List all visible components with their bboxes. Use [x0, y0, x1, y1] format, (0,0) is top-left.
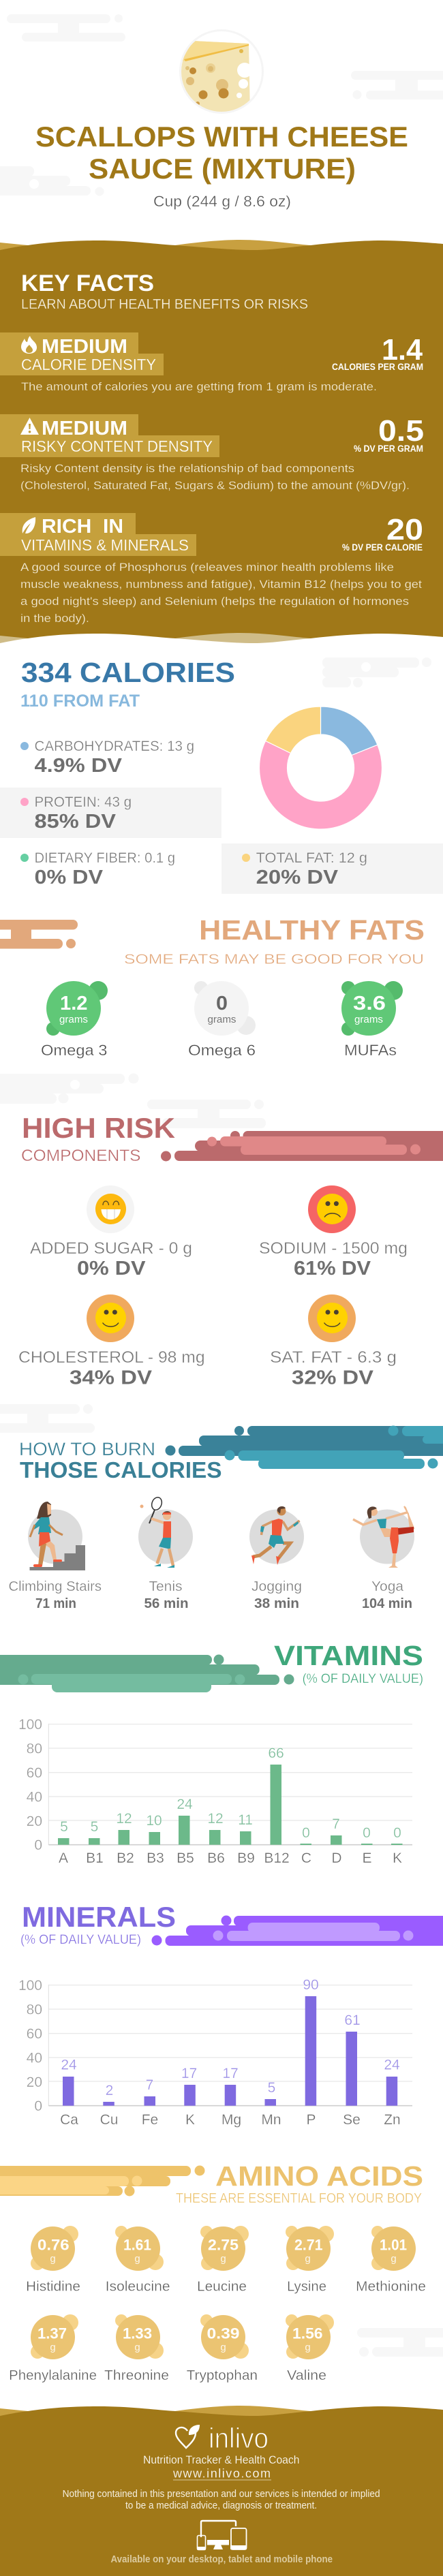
bar chart: vitamins: 66 — [268, 1745, 284, 1761]
legend: protein — [0, 788, 222, 838]
bar chart: vitamins: 5 — [91, 1819, 98, 1835]
heading: key facts: LEARN ABOUT HEALTH BENEFITS OR RISKS — [21, 297, 308, 312]
bar chart: vitamins: B6 — [207, 1850, 225, 1866]
amino acid: leucine — [197, 2226, 249, 2295]
icon: jogger — [251, 1506, 300, 1565]
risk item: sodium: 61% DV — [294, 1258, 371, 1279]
amino acid: leucine: Leucine — [197, 2280, 247, 2295]
bar chart: minerals: 90 — [303, 1977, 319, 1993]
bar chart: vitamins: 100 — [18, 1717, 42, 1733]
panel: calorie density: The amount of calories you are getting from 1 gram is moderate. — [21, 380, 377, 393]
amino acid: valine: 1.56 — [292, 2325, 323, 2342]
disclaimer: to be a medical advice, diagnosis or treatment. — [125, 2500, 317, 2511]
amino acid: threonine: Threonine — [104, 2368, 169, 2383]
bar chart: vitamins: 0 — [363, 1825, 371, 1841]
risk item: saturated fat: 32% DV — [292, 1367, 374, 1388]
bar chart: vitamins: 40 — [27, 1789, 42, 1805]
heading: vitamins: (% OF DAILY VALUE) — [303, 1672, 423, 1686]
exercise: tennis — [138, 1496, 193, 1611]
amino acid: phenylalanine — [9, 2314, 97, 2383]
bar chart: minerals: K — [185, 2112, 195, 2128]
heading: key facts — [21, 270, 308, 312]
decoration: amino acid bars — [0, 2165, 204, 2197]
amino acid: histidine: 0.76 — [37, 2237, 70, 2254]
bar chart: vitamins: D — [331, 1850, 342, 1866]
decoration: burn bars — [165, 1425, 443, 1469]
heading: high risk components — [21, 1112, 175, 1165]
icon: devices — [197, 2521, 247, 2550]
title — [35, 121, 408, 185]
background clouds: high risk — [0, 1074, 266, 1128]
exercise: climbing stairs — [8, 1502, 102, 1611]
bar chart: vitamins: C — [301, 1850, 311, 1866]
icon: smiling face — [95, 1303, 126, 1333]
panel: rich in vitamins and minerals: A good source of Phosphorus (releaves minor health problems like — [20, 561, 394, 574]
fat badge: MUFAs — [341, 981, 403, 1059]
bar chart: vitamins: 60 — [27, 1765, 42, 1781]
exercise: climbing stairs: Climbing Stairs — [8, 1579, 102, 1594]
panel: calorie density: CALORIE DENSITY — [21, 356, 156, 373]
heading: calories — [20, 657, 235, 711]
bar chart: vitamins: B5 — [177, 1850, 194, 1866]
risk item: added sugar: 0% DV — [77, 1258, 146, 1279]
amino acid: threonine — [104, 2314, 169, 2383]
bar chart: vitamins: 0 — [393, 1825, 401, 1841]
bar chart: minerals: 17 — [181, 2066, 197, 2081]
bar chart: vitamins: 12 — [207, 1811, 224, 1827]
fat badge: omega 6: Omega 6 — [188, 1042, 256, 1059]
bar chart: minerals: 20 — [27, 2075, 42, 2090]
amino acid: histidine: Histidine — [26, 2280, 80, 2295]
icon: yoga pose — [353, 1506, 414, 1568]
amino acid: tryptophan: 0.39 — [207, 2325, 240, 2342]
panel: rich in vitamins and minerals — [0, 513, 423, 625]
background clouds: header — [0, 14, 443, 196]
bar chart: minerals: Mn — [261, 2112, 281, 2128]
heading: calories: 334 CALORIES — [21, 657, 235, 688]
amino acid: isoleucine: Isoleucine — [106, 2280, 170, 2295]
amino acid: methionine — [356, 2226, 426, 2295]
bar chart: vitamins: K — [393, 1850, 402, 1866]
website link: www.inlivo.com — [172, 2467, 271, 2481]
heading: key facts: KEY FACTS — [21, 270, 154, 296]
risk item: saturated fat — [270, 1294, 397, 1388]
bar chart: vitamins: B3 — [147, 1850, 164, 1866]
bar chart: minerals: 60 — [27, 2026, 42, 2042]
bar chart: vitamins: B12 — [264, 1850, 290, 1866]
risk item: sodium: SODIUM - 1500 mg — [259, 1239, 408, 1258]
background cloud: amino acids — [357, 2328, 443, 2357]
exercise: yoga: 104 min — [362, 1596, 412, 1611]
title: SAUCE (MIXTURE) — [89, 153, 356, 185]
panel: key facts background — [0, 240, 443, 644]
exercise: tennis: 56 min — [144, 1596, 188, 1611]
heading: minerals — [20, 1901, 176, 1947]
fat badge: omega 3: Omega 3 — [41, 1042, 108, 1059]
exercise: yoga: Yoga — [371, 1579, 404, 1594]
decoration: vitamins bars — [0, 1654, 294, 1692]
bar chart: minerals: 24 — [61, 2058, 77, 2073]
amino acid: methionine: g — [391, 2253, 397, 2265]
bar chart: vitamins: B2 — [117, 1850, 134, 1866]
bar chart: vitamins: 7 — [332, 1816, 340, 1832]
heading: minerals: (% OF DAILY VALUE) — [20, 1933, 141, 1947]
heading: healthy fats — [124, 914, 425, 967]
amino acid: valine — [286, 2314, 334, 2383]
amino acid: phenylalanine: 1.37 — [37, 2325, 67, 2342]
legend: carbohydrates: CARBOHYDRATES: 13 g — [34, 739, 194, 754]
bar chart: vitamins: A — [59, 1850, 68, 1866]
risk item: cholesterol: CHOLESTEROL - 98 mg — [18, 1348, 205, 1367]
legend: total fat — [222, 843, 443, 894]
amino acid: valine: g — [305, 2342, 311, 2353]
amino acid: methionine: Methionine — [356, 2280, 426, 2295]
amino acid: leucine: g — [220, 2253, 226, 2265]
title: SCALLOPS WITH CHEESE — [35, 121, 408, 153]
background cloud: burn — [0, 1404, 95, 1433]
panel: calorie density: MEDIUM — [42, 336, 127, 358]
icon: leaf — [22, 517, 35, 533]
fat badge: MUFAs: MUFAs — [344, 1042, 397, 1059]
amino acid: leucine: 2.75 — [208, 2237, 239, 2254]
panel: rich in vitamins and minerals: RICH IN — [42, 516, 123, 538]
amino acid: lysine: Lysine — [287, 2280, 326, 2295]
fat badge: omega 3: grams — [59, 1014, 88, 1025]
bar chart: vitamins: B1 — [86, 1850, 104, 1866]
bar chart: minerals: 17 — [222, 2066, 239, 2081]
panel: rich in vitamins and minerals: % DV PER CALORIE — [342, 542, 423, 553]
wave divider: key facts bottom — [0, 633, 443, 666]
legend: carbohydrates: 4.9% DV — [34, 755, 123, 777]
bar chart: vitamins: 20 — [27, 1814, 42, 1829]
amino acid: histidine: g — [50, 2253, 56, 2265]
legend: protein: PROTEIN: 43 g — [34, 794, 132, 810]
legend: total fat: 20% DV — [256, 867, 339, 888]
heading: calories: 110 FROM FAT — [20, 692, 140, 711]
amino acid: isoleucine: 1.61 — [123, 2237, 151, 2254]
bar chart: minerals: 7 — [146, 2077, 153, 2093]
bar chart: minerals: 2 — [106, 2083, 113, 2098]
availability note: Available on your desktop, tablet and mobile phone — [110, 2554, 333, 2565]
amino acid: histidine — [26, 2226, 80, 2295]
bar chart: minerals: Zn — [384, 2112, 401, 2128]
icon: flame — [21, 336, 37, 354]
panel: calorie density — [0, 332, 423, 393]
amino acid: isoleucine: g — [134, 2253, 140, 2265]
icon: grinning face — [95, 1194, 126, 1224]
tagline: Nutrition Tracker & Health Coach — [143, 2453, 300, 2466]
bar chart: vitamins: 10 — [146, 1813, 162, 1829]
bar chart: minerals: 5 — [268, 2080, 275, 2096]
exercise: tennis: Tenis — [149, 1579, 183, 1594]
panel: risky content density: 0.5 — [378, 414, 424, 448]
bar chart: vitamins: 24 — [177, 1797, 193, 1812]
amino acid: lysine: g — [305, 2253, 311, 2265]
panel: rich in vitamins and minerals: 20 — [386, 513, 423, 546]
heading: how to burn: HOW TO BURN — [19, 1439, 155, 1459]
amino acid: lysine: 2.71 — [294, 2237, 323, 2254]
legend: total fat: TOTAL FAT: 12 g — [256, 850, 367, 866]
heading: healthy fats: HEALTHY FATS — [199, 914, 425, 946]
fat badge: omega 3 — [41, 981, 108, 1059]
decoration: minerals bars — [151, 1916, 443, 1946]
risk item: cholesterol: 34% DV — [70, 1367, 153, 1388]
exercise: jogging: 38 min — [254, 1596, 299, 1611]
heading: high risk components: COMPONENTS — [21, 1147, 140, 1165]
risk item: cholesterol — [18, 1294, 205, 1388]
exercise: jogging: Jogging — [251, 1579, 302, 1594]
bar chart: minerals: P — [306, 2112, 316, 2128]
panel: risky content density: % DV PER GRAM — [354, 444, 423, 454]
bar chart: minerals: Mg — [222, 2112, 241, 2128]
amino acid: methionine: 1.01 — [380, 2237, 407, 2254]
heading: how to burn — [19, 1439, 222, 1483]
exercise: climbing stairs: 71 min — [35, 1596, 76, 1611]
legend: dietary fiber — [20, 850, 175, 888]
amino acid: tryptophan: Tryptophan — [187, 2368, 258, 2383]
bar chart: minerals: 40 — [27, 2051, 42, 2066]
icon: climber on stairs — [30, 1502, 85, 1570]
icon: smiling face — [317, 1303, 348, 1333]
icon: warning triangle — [20, 418, 39, 435]
panel: risky content density: (Cholesterol, Saturated Fat, Sugars & Sodium) to the amount (%DV/gr). — [20, 479, 410, 492]
panel: rich in vitamins and minerals: in the body). — [20, 612, 89, 625]
amino acid: isoleucine — [106, 2226, 170, 2295]
disclaimer — [63, 2489, 380, 2511]
amino acid: threonine: 1.33 — [123, 2325, 152, 2342]
icon: cheese photo — [179, 29, 264, 116]
serving size: Cup (244 g / 8.6 oz) — [153, 193, 291, 210]
legend: protein: 85% DV — [34, 811, 117, 833]
icon: tennis player — [140, 1496, 174, 1568]
bar chart: vitamins: 11 — [238, 1812, 253, 1828]
bar chart: minerals: 61 — [344, 2013, 361, 2028]
bar chart: minerals: Ca — [60, 2112, 78, 2128]
fat badge: MUFAs: grams — [354, 1014, 383, 1025]
amino acid: valine: Valine — [287, 2368, 326, 2383]
heading: amino acids — [176, 2160, 423, 2206]
panel: rich in vitamins and minerals: VITAMINS & MINERALS — [21, 536, 189, 554]
decoration: high risk bars — [161, 1131, 443, 1161]
heading: minerals: MINERALS — [22, 1901, 176, 1933]
exercise: jogging — [249, 1506, 304, 1611]
heading: vitamins — [274, 1640, 423, 1686]
fat badge: MUFAs: 3.6 — [353, 993, 386, 1014]
heading: how to burn: THOSE CALORIES — [20, 1457, 222, 1483]
fat badge: omega 6: grams — [207, 1014, 236, 1025]
risk item: saturated fat: SAT. FAT - 6.3 g — [270, 1348, 397, 1367]
heading: healthy fats: SOME FATS MAY BE GOOD FOR YOU — [124, 952, 424, 967]
amino acid: phenylalanine: g — [50, 2342, 56, 2353]
icon: sad face — [317, 1194, 348, 1224]
bar chart: minerals: 80 — [27, 2002, 42, 2018]
bar chart: minerals: 24 — [384, 2058, 400, 2073]
bar chart: vitamins: 0 — [302, 1825, 310, 1841]
icon: heart with leaf — [176, 2425, 200, 2448]
panel: rich in vitamins and minerals: muscle weakness, numbness and fatigue), Vitamin B12 (helps you to get — [20, 578, 422, 591]
decoration: healthy fats bars — [0, 920, 78, 948]
panel: calorie density: CALORIES PER GRAM — [332, 362, 423, 372]
risk item: sodium — [259, 1185, 408, 1279]
fat badge: omega 6: 0 — [216, 993, 228, 1014]
exercise: yoga — [353, 1506, 414, 1611]
disclaimer: Nothing contained in this presentation and our services is intended or implied — [63, 2489, 380, 2500]
panel: footer background — [0, 2406, 443, 2576]
fat badge: omega 3: 1.2 — [60, 993, 87, 1014]
bar chart: minerals: Fe — [142, 2112, 158, 2128]
bar chart: minerals: Se — [343, 2112, 361, 2128]
bar chart: vitamins: 12 — [116, 1811, 132, 1827]
panel: risky content density: RISKY CONTENT DENSITY — [21, 437, 213, 455]
bar chart: minerals: 0 — [34, 2098, 42, 2114]
bar chart: minerals: Cu — [100, 2112, 118, 2128]
risk item: added sugar — [30, 1185, 192, 1279]
panel: rich in vitamins and minerals: a good night's sleep) and Selenium (helps the regulation of hormones — [20, 595, 409, 608]
panel: calorie density: 1.4 — [382, 333, 423, 367]
legend: carbohydrates — [20, 739, 194, 777]
bar chart: vitamins: E — [362, 1850, 372, 1866]
bar chart: vitamins — [18, 1717, 412, 1866]
logo: inlivo — [176, 2422, 269, 2454]
bar chart: minerals — [18, 1977, 412, 2128]
risk item: added sugar: ADDED SUGAR - 0 g — [30, 1239, 192, 1258]
fat badge: omega 6 — [188, 981, 256, 1059]
donut chart: macronutrients — [259, 707, 382, 829]
heading: high risk components: HIGH RISK — [22, 1112, 175, 1144]
bar chart: vitamins: B9 — [237, 1850, 255, 1866]
heading: amino acids: AMINO ACIDS — [215, 2160, 423, 2192]
heading: vitamins: VITAMINS — [274, 1640, 423, 1671]
logo: inlivo: inlivo — [209, 2422, 269, 2454]
amino acid: tryptophan — [187, 2314, 258, 2383]
bar chart: vitamins: 5 — [60, 1819, 68, 1835]
panel: risky content density — [0, 414, 424, 492]
legend: dietary fiber: DIETARY FIBER: 0.1 g — [34, 850, 175, 866]
bar chart: vitamins: 80 — [27, 1741, 42, 1756]
bar chart: minerals: 100 — [18, 1978, 42, 1993]
amino acid: lysine — [286, 2226, 334, 2295]
amino acid: phenylalanine: Phenylalanine — [9, 2368, 97, 2383]
panel: risky content density: Risky Content density is the relationship of bad components — [20, 462, 354, 475]
background cloud: calories — [322, 657, 431, 687]
bar chart: vitamins: 0 — [34, 1837, 42, 1853]
heading: amino acids: THESE ARE ESSENTIAL FOR YOUR BODY — [176, 2191, 422, 2206]
panel: risky content density: MEDIUM — [42, 418, 127, 439]
legend: dietary fiber: 0% DV — [34, 867, 104, 888]
amino acid: tryptophan: g — [220, 2342, 226, 2353]
amino acid: threonine: g — [134, 2342, 140, 2353]
